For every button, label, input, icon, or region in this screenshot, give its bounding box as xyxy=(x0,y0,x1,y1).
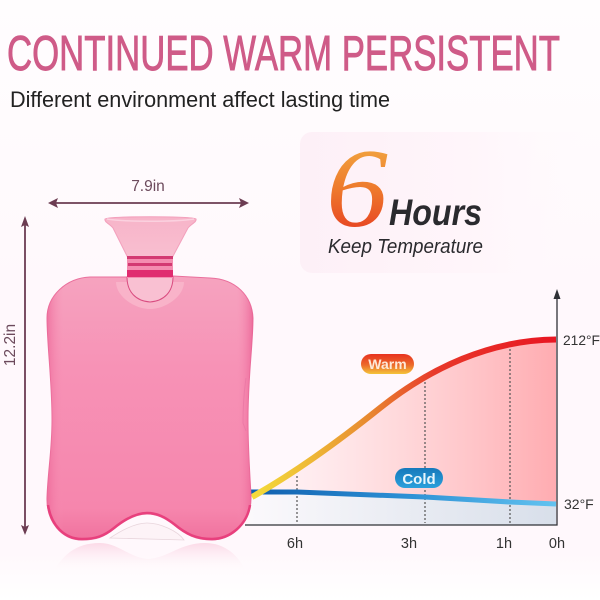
side seam xyxy=(243,378,246,431)
height arrow: 12.2in xyxy=(2,324,19,366)
keep temperature label: Keep Temperature xyxy=(328,236,483,258)
x labels: 1h xyxy=(496,536,512,552)
width arrow: 7.9in xyxy=(131,178,165,195)
bottle body xyxy=(47,276,253,540)
height arrow xyxy=(2,216,29,535)
x labels xyxy=(287,536,565,552)
neck rings xyxy=(127,256,173,278)
reflection xyxy=(53,543,246,573)
cold pill xyxy=(395,468,443,488)
lower rim xyxy=(48,505,250,539)
neck insert xyxy=(127,277,173,302)
y labels: 32°F xyxy=(564,496,594,512)
axis arrow xyxy=(554,289,560,299)
width arrow xyxy=(48,178,249,208)
axes xyxy=(245,294,557,525)
icon: hot water bottle xyxy=(47,217,253,573)
hours label: Hours xyxy=(389,192,482,233)
big number 6: 6 xyxy=(326,127,388,251)
neck notch xyxy=(116,282,184,309)
x labels: 0h xyxy=(549,536,565,552)
x labels: 6h xyxy=(287,536,303,552)
body edge shading xyxy=(47,276,253,540)
warm pill: Warm xyxy=(368,356,407,372)
bottle base highlight xyxy=(110,523,184,540)
warm pill xyxy=(361,354,414,374)
y labels xyxy=(563,332,600,512)
cold pill: Cold xyxy=(402,471,436,488)
y labels: 212°F xyxy=(563,332,600,348)
subtitle: Different environment affect lasting time xyxy=(10,87,390,112)
chart: temperature over time xyxy=(245,289,600,552)
x labels: 3h xyxy=(401,536,417,552)
warm area xyxy=(252,339,556,525)
panel: 6 hours xyxy=(300,127,600,273)
cold line xyxy=(250,492,556,504)
warm line xyxy=(252,340,556,497)
cold area xyxy=(250,492,556,525)
funnel xyxy=(105,217,196,258)
